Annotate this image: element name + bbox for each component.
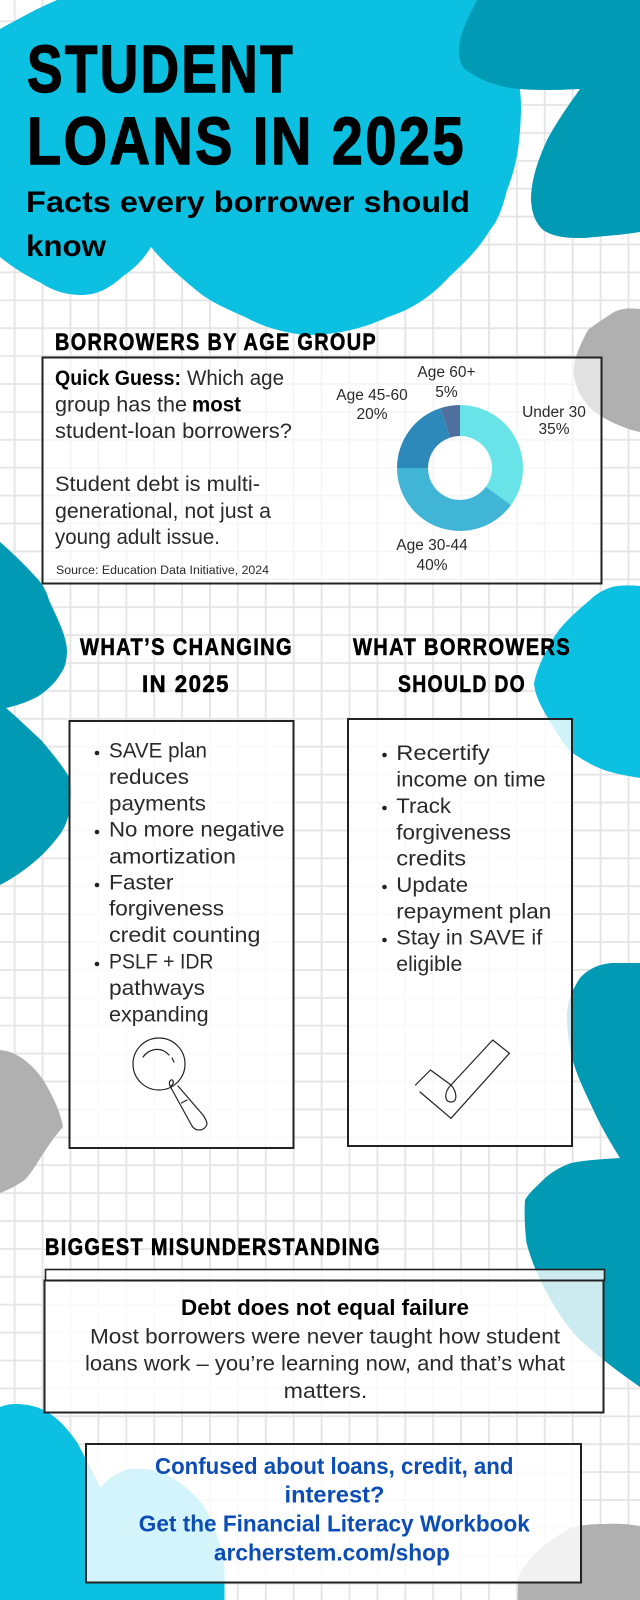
heading: what's changing in 2025	[80, 634, 293, 698]
heading: what borrowers should do: WHAT BORROWERS	[353, 634, 571, 661]
label: age 30-44: Age 30-44	[396, 537, 468, 554]
explanation text	[55, 473, 271, 549]
donut chart	[397, 405, 523, 531]
title	[27, 32, 466, 179]
label: under 30: 35%	[538, 421, 570, 438]
heading: biggest misunderstanding: BIGGEST MISUNDERSTANDING	[45, 1234, 381, 1261]
label: age 30-44: 40%	[416, 557, 448, 574]
subtitle: Facts every borrower should	[26, 186, 470, 219]
blob: right cyan shape	[534, 585, 640, 778]
panel: call to action	[86, 1444, 581, 1582]
panel: what borrowers should do	[348, 719, 572, 1146]
quick guess text: student-loan borrowers?	[55, 420, 292, 443]
quick guess text: Quick Guess:	[55, 367, 181, 390]
blob: right teal shape	[525, 963, 640, 1387]
panel: biggest misunderstanding	[44, 1270, 604, 1412]
label: age 30-44	[396, 537, 468, 574]
quick guess text: Which age	[187, 367, 284, 390]
label: under 30	[522, 404, 586, 438]
bullet list: changes: SAVE plan	[109, 739, 207, 762]
icon: magnifying glass	[133, 1038, 207, 1130]
bullet list: changes: No more negative	[109, 819, 284, 842]
label: age 45-60	[336, 387, 408, 423]
bullet list: changes: amortization	[109, 845, 236, 868]
blob: left grey shape	[0, 1050, 63, 1193]
heading: what borrowers should do	[353, 634, 571, 698]
bullet list: actions: forgiveness	[396, 821, 511, 844]
bullet list: actions: Stay in SAVE if	[396, 926, 542, 949]
label: age 60+	[417, 364, 476, 401]
heading: what's changing in 2025: IN 2025	[142, 671, 230, 698]
callout body: loans work – you’re learning now, and that’s what	[85, 1353, 565, 1376]
bullet list: changes: payments	[109, 793, 206, 816]
callout headline: Debt does not equal failure	[181, 1295, 469, 1320]
quick guess text: most	[192, 394, 241, 417]
blob: bottom left cyan shape	[0, 1404, 224, 1600]
subtitle	[26, 186, 470, 263]
call to action text: interest?	[284, 1482, 384, 1508]
label: under 30: Under 30	[522, 404, 586, 421]
title: STUDENT	[27, 32, 295, 107]
explanation text: young adult issue.	[55, 526, 220, 549]
callout body	[85, 1325, 565, 1403]
bullet list: changes: credit counting	[109, 924, 260, 947]
panel: borrowers by age group	[42, 358, 602, 584]
quick guess text: group has the	[55, 394, 187, 417]
blob: top cyan header shape	[0, 0, 521, 335]
quick guess text	[55, 367, 292, 443]
explanation text: Student debt is multi-	[55, 473, 260, 496]
call to action text: Confused about loans, credit, and	[155, 1453, 514, 1479]
bullet list: actions: repayment plan	[396, 900, 551, 923]
blob: left teal shape	[0, 542, 72, 885]
bullet list: actions: eligible	[396, 953, 462, 976]
source note: Source: Education Data Initiative, 2024	[56, 565, 270, 577]
bullet list: actions	[382, 742, 551, 976]
bullet list: changes: Faster	[109, 871, 174, 894]
bullet list: changes	[95, 739, 284, 1027]
bullet list: changes: pathways	[109, 977, 205, 1000]
label: age 45-60: 20%	[356, 406, 388, 423]
bullet list: actions: Track	[396, 795, 452, 818]
label: age 45-60: Age 45-60	[336, 387, 408, 404]
bullet list: actions: credits	[396, 847, 466, 870]
heading: borrowers by age group: BORROWERS BY AGE GROUP	[55, 329, 377, 356]
bullet list: changes: PSLF + IDR	[109, 950, 214, 973]
heading: what's changing in 2025: WHAT’S CHANGING	[80, 634, 293, 661]
call to action text	[139, 1453, 530, 1566]
bullet list: actions: Update	[396, 874, 468, 897]
label: age 60+: 5%	[435, 384, 458, 401]
icon: check mark	[416, 1040, 509, 1118]
call to action text: Get the Financial Literacy Workbook	[139, 1511, 530, 1537]
bullet list: changes: forgiveness	[109, 898, 224, 921]
callout body: matters.	[284, 1380, 367, 1403]
bullet list: actions: Recertify	[396, 742, 490, 765]
blob: bottom right grey shape	[518, 1524, 640, 1600]
bullet list: actions: income on time	[396, 769, 546, 792]
callout body: Most borrowers were never taught how student	[90, 1325, 560, 1348]
bullet list: changes: expanding	[109, 1004, 209, 1027]
subtitle: know	[26, 230, 107, 263]
heading: what borrowers should do: SHOULD DO	[398, 671, 526, 698]
blob: top right teal shape	[459, 0, 640, 238]
title: LOANS IN 2025	[27, 104, 466, 179]
call to action text: archerstem.com/shop	[214, 1540, 450, 1566]
label: age 60+: Age 60+	[417, 364, 476, 381]
blob: top right grey shape	[574, 308, 640, 432]
panel: what's changing	[70, 721, 294, 1148]
bullet list: changes: reduces	[109, 766, 189, 789]
explanation text: generational, not just a	[55, 500, 271, 523]
